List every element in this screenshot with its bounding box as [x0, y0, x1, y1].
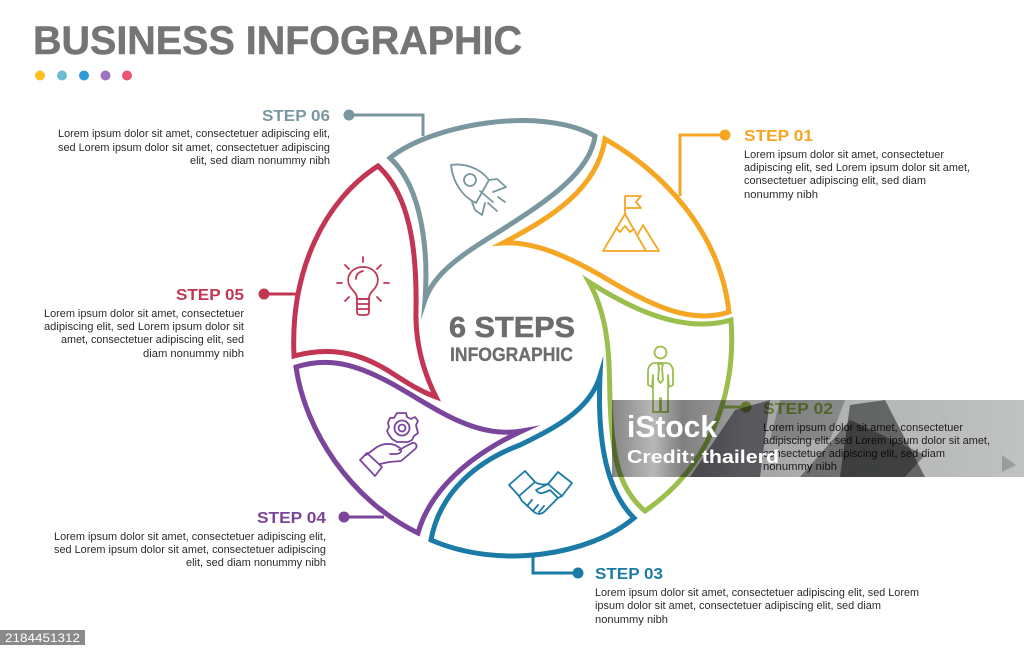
text: step 01: Lorem ipsum dolor sit amet, consectetuer	[744, 149, 944, 161]
text: step 06: Lorem ipsum dolor sit amet, consectetuer adipiscing elit,	[58, 128, 330, 140]
text: step 04	[54, 510, 326, 569]
segment: step 02 green	[589, 282, 732, 511]
text: step 01: nonummy nibh	[744, 189, 818, 201]
watermark band: iStock	[627, 409, 718, 444]
image id tag: 2184451312	[5, 633, 80, 645]
text: step 06	[58, 108, 330, 167]
center heading	[449, 312, 575, 366]
icon: mountain with flag	[603, 196, 659, 251]
text: step 05	[44, 287, 244, 360]
text: step 05: Lorem ipsum dolor sit amet, consectetuer	[44, 308, 244, 320]
text: step 02: consectetuer adipiscing elit, sed diam	[763, 448, 945, 460]
connector: step 01	[680, 130, 730, 196]
text: step 02: Lorem ipsum dolor sit amet, consectetuer	[763, 422, 963, 434]
text: step 03: ipsum dolor sit amet, consectetuer adipiscing elit, sed diam	[595, 600, 881, 612]
text: step 04: Lorem ipsum dolor sit amet, consectetuer adipiscing elit,	[54, 531, 326, 543]
text: step 01	[744, 128, 970, 201]
text: step 04: sed Lorem ipsum dolor sit amet, consectetuer adipiscing	[54, 544, 326, 556]
text: step 01: adipiscing elit, sed Lorem ipsum dolor sit amet,	[744, 162, 970, 174]
segment: step 01 orange	[503, 139, 729, 316]
text: step 02	[763, 401, 990, 473]
connector: step 04	[338, 512, 384, 522]
text: step 05: adipiscing elit, sed Lorem ipsum dolor sit	[44, 321, 244, 333]
icon: businessman	[648, 346, 673, 412]
text: step 02: nonummy nibh	[763, 461, 837, 473]
text: step 05: amet, consectetuer adipiscing elit, sed	[61, 334, 244, 346]
center heading: INFOGRAPHIC	[450, 345, 573, 366]
icon: rocket	[451, 165, 506, 215]
watermark band	[612, 400, 1024, 477]
segment: step 04 purple	[296, 362, 522, 533]
image id tag	[0, 630, 85, 645]
segment: step 05 red	[294, 166, 436, 397]
text: step 05: STEP 05	[176, 287, 244, 304]
connector: step 05	[258, 288, 296, 300]
segment: step 06 slate	[390, 121, 595, 300]
text: step 02: STEP 02	[763, 401, 833, 418]
text: step 02: adipiscing elit, sed Lorem ipsum dolor sit amet,	[763, 435, 990, 447]
text: step 04: elit, sed diam nonummy nibh	[186, 557, 326, 569]
icon: handshake	[509, 471, 572, 514]
center heading: 6 STEPS	[449, 312, 575, 344]
watermark band: Credit: thailerd	[627, 447, 779, 467]
text: step 03: nonummy nibh	[595, 614, 668, 626]
text: step 05: diam nonummy nibh	[143, 348, 244, 360]
connector: step 06	[344, 110, 423, 136]
connector: step 03	[533, 557, 584, 578]
text: step 06: STEP 06	[262, 108, 330, 125]
segment: step 03 blue	[431, 376, 634, 556]
text: step 06: elit, sed diam nonummy nibh	[190, 155, 330, 167]
text: step 01: consectetuer adipiscing elit, sed diam	[744, 175, 926, 187]
text: step 03	[595, 566, 919, 626]
text: step 06: sed Lorem ipsum dolor sit amet, consectetuer adipiscing	[58, 142, 330, 154]
icon: lightbulb	[337, 257, 389, 315]
title: BUSINESS INFOGRAPHIC	[33, 19, 522, 63]
connector: step 02	[719, 402, 752, 412]
text: step 04: STEP 04	[257, 510, 326, 527]
text: step 03: Lorem ipsum dolor sit amet, consectetuer adipiscing elit, sed Lorem	[595, 587, 919, 599]
text: step 01: STEP 01	[744, 128, 813, 145]
title colour dots	[35, 70, 132, 80]
text: step 03: STEP 03	[595, 566, 663, 583]
icon: hand holding gear	[360, 413, 418, 476]
